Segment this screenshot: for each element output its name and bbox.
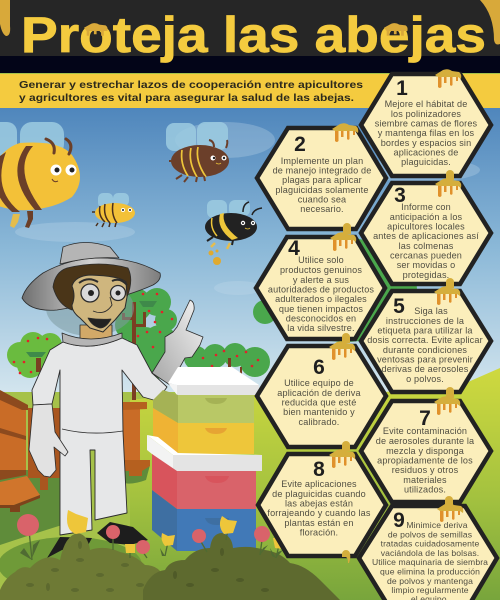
top lid [168,367,259,385]
yellow box [153,408,178,454]
honey drip left [0,0,10,36]
hexagon 9: de polvos y mantenga [387,576,473,586]
hexagon 3: ser movidas o [397,260,455,270]
hexagon 4: que tienen impactos [279,304,363,314]
hexagon 3: apicultores locales [387,222,465,232]
hexagon 9: tratadas cuidadosamente [381,538,480,548]
hexagon 5: instrucciones de la [386,316,465,326]
hexagon 8: forrajeando y cuando las [267,508,371,518]
hexagon 3: Informe con [401,202,451,212]
hexagon 9: vaciándola de las bolsas. [381,548,479,558]
honey drip right [480,0,500,44]
hexagon 1: los polinizadores [391,109,461,119]
hexagon 3: las colmenas [399,241,454,251]
neck [80,325,112,343]
waist line [62,429,123,433]
honey on title letter e [384,23,408,36]
hexagon 9: Minimice deriva [406,520,468,530]
hexagon 4: 4 [288,237,300,260]
green tree behind hexagons [253,238,417,342]
hexagon 6: 6 [313,356,325,379]
hexagon 1 [361,69,491,176]
tree: centre [115,288,177,400]
mouth and nose [88,318,111,328]
collar [62,333,122,346]
hexagon 1: siembre camas de flores [375,118,478,128]
bee: large yellow [0,122,80,228]
bee: black with honey drops [205,200,262,265]
hexagon 9 [359,496,497,600]
hexagon 8: floración. [300,528,338,538]
hexagon 5: dosis correcta. Evite aplicar [367,335,483,345]
right glove with pointing finger [152,300,203,385]
hexagon 6: Utilice equipo de [284,378,354,388]
right shoe [97,522,148,545]
hexagon 7: apropiadamente de los [377,456,473,466]
hexagon 2: de manejo integrado de [273,166,371,176]
eyes [81,284,99,302]
tulips [17,510,286,560]
hexagon 3: anticipación a los [390,212,463,222]
hexagon 2: necesario. [300,204,344,214]
hexagon 5: Siga las [414,306,448,316]
hexagon 1: aplicaciones de [394,148,458,158]
hexagon 4: productos genuinos [280,265,362,275]
hexagon 8: las abejas están [285,498,353,508]
hexagon 1: plaguicidas. [401,157,451,167]
hexagon 2 [257,123,386,229]
tree: right [184,343,270,383]
hexagon 2: Implemente un plan [281,156,363,166]
hexagon 5: durante condiciones [383,345,467,355]
hexagon 3: protegidas. [403,270,449,280]
middle lid [147,435,262,455]
hexagon 5: derivas de aerosoles [382,364,469,374]
left shoe [47,537,92,558]
hexagon 1: 1 [396,77,408,100]
blue box [152,490,177,551]
hexagon 7: residuos y otros [392,465,459,475]
eyebrows [79,279,127,285]
hat brim [22,258,160,310]
hexagon 4: Utilice solo [298,255,344,265]
hexagon 8: 8 [313,458,325,481]
hexagon 5: etiqueta para utilizar la [377,326,473,336]
trees [7,238,417,400]
ground base [0,385,500,600]
hexagon 3: antes de aplicaciones así [373,231,479,241]
stacked beehive [147,367,262,551]
hexagon 4 [256,223,385,339]
tree: left [7,332,62,378]
clouds [15,122,480,295]
header bar [0,0,500,73]
hexagon 4: adulterados o ilegales [275,294,367,304]
hexagon 2: 2 [294,133,306,156]
hexagon 6: reducida que esté [282,398,356,408]
hexagon 9: que elimina la producción [380,566,480,576]
bushes [0,533,340,600]
suit [32,338,167,535]
hexagon 7: mezcla y disponga [386,446,465,456]
left glove [29,404,68,477]
honey on title letter o [84,23,108,36]
hexagon 1: y mantenga filas en los [378,128,475,138]
hexagon 8: de plaguicidas cuando [272,489,366,499]
hexagon 6 [257,333,386,447]
hexagon 7: 7 [419,407,431,430]
hexagon 3: 3 [394,184,406,207]
hexagon 8: Evite aplicaciones [281,479,357,489]
hexagon 7: de aerosoles durante la [376,436,475,446]
hexagon 5: o polvos. [406,374,444,384]
hexagon 1: bordes y espacios sin [381,138,471,148]
hexagon 9: 9 [393,509,405,532]
hexagon 5: ventosas para prevenir [377,354,473,364]
hexagon 4: desconocidos en [286,314,356,324]
bee: small yellow [92,193,135,227]
sky background [0,108,500,393]
hexagon 9: Utilice maquinaria de siembra [372,557,488,567]
hexagon 2: plaguicidas solamente [275,185,369,195]
red box [152,454,177,509]
hexagon 2: cuando sea [298,194,347,204]
hexagon 3: cercanas pueden [390,250,462,260]
hexagon 2: plagas para aplicar [282,175,362,185]
hexagon 4: la vida silvestre. [287,323,355,333]
hexagon 9: limpio regularmente [391,585,469,595]
hexagon 6: aplicación de deriva [277,388,361,398]
hexagon 8 [258,441,386,563]
honey drop below hexagon 8 [342,550,350,563]
hexagon 9: de polvos de semillas [388,530,472,540]
beekeeper [22,242,203,558]
hexagon 1: Mejore el hábitat de [385,99,467,109]
hat crown [60,242,119,264]
hexagon 8: plantas están en [284,518,354,528]
intro text line 2: y agricultores es vital para asegurar la salud de las abejas. [19,92,354,104]
hair [53,264,131,310]
hexagon 7: materiales [403,475,447,485]
intro text line 1: Generar y estrechar lazos de cooperación entre apicultores [19,79,363,91]
hexagon 5: 5 [393,295,405,318]
green box [153,390,178,423]
veil [46,280,134,336]
ground details [0,368,500,600]
hexagon 4: autoridades de productos [268,284,374,294]
hexagon 7: Evite contaminación [383,426,467,436]
title: Proteja las abejas [21,7,486,63]
hexagon 5 [361,278,491,392]
hexagon 7 [361,387,491,502]
bee: brown [166,122,229,182]
wooden hives [0,390,150,512]
hexagon 6: bien mantenido y [283,407,355,417]
face [72,275,127,332]
hexagon 7: utilizados. [404,484,446,494]
hexagon 6: calibrado. [299,417,339,427]
intro band [0,74,500,108]
hexagon 3 [361,170,491,284]
hexagon 4: y alerte a sus [293,275,349,285]
